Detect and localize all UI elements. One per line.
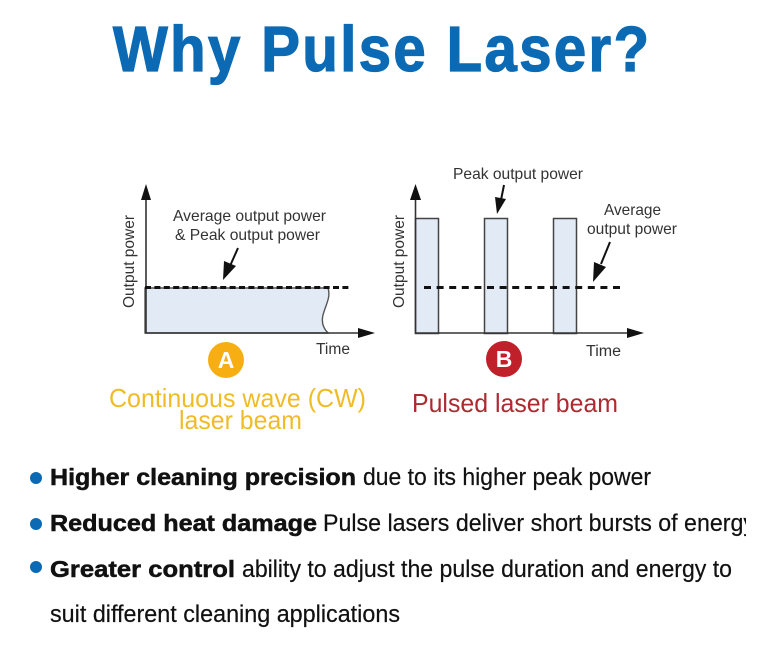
chart A time label: Time <box>316 341 350 358</box>
title: Why Pulse Laser? <box>113 13 649 85</box>
bullet: precision: due to its higher peak power <box>363 464 651 491</box>
chart A y axis label: Output power <box>121 215 138 308</box>
pulses <box>416 218 576 334</box>
bullet: control: suit different cleaning applications <box>50 601 400 628</box>
average power label: Average <box>604 202 661 219</box>
chart B time label: Time <box>586 343 621 360</box>
panel: pulsed chart <box>391 166 678 360</box>
badge B: B <box>496 346 512 372</box>
average power label <box>587 202 678 238</box>
caption A <box>109 383 366 435</box>
chart B dashed power line <box>424 286 620 289</box>
chart A power annotation: Average output power <box>173 208 327 225</box>
badge B <box>486 341 522 377</box>
bullet: heat damage <box>30 513 746 536</box>
panel: continuous wave chart <box>121 184 375 358</box>
peak arrow <box>495 185 506 214</box>
chart B y axis label: Output power <box>391 215 408 308</box>
chart A filled area <box>145 288 329 333</box>
chart A power annotation <box>173 208 327 244</box>
average power label: output power <box>587 221 678 238</box>
badge A: A <box>218 347 234 373</box>
average arrow <box>593 242 610 282</box>
bullet: precision <box>30 464 651 491</box>
caption A: laser beam <box>179 405 302 435</box>
bullet: heat damage: Reduced heat damage <box>50 510 317 536</box>
bullet: control <box>30 556 732 628</box>
bullet: heat damage: Pulse lasers deliver short bursts of energy <box>323 510 755 537</box>
chart A arrow <box>223 248 238 280</box>
caption B: Pulsed laser beam <box>412 388 618 418</box>
bullet: control: Greater control <box>50 556 235 582</box>
chart A axes <box>141 184 375 338</box>
bullet: control: ability to adjust the pulse duration and energy to <box>242 556 732 583</box>
bullet: precision: Higher cleaning precision <box>50 464 356 490</box>
chart A power annotation: & Peak output power <box>175 227 321 244</box>
chart B axes <box>410 184 644 338</box>
chart A dashed power line <box>145 286 350 289</box>
caption A: Continuous wave (CW) <box>109 383 366 413</box>
badge A <box>208 342 244 378</box>
peak power label: Peak output power <box>453 166 584 183</box>
bullet list <box>30 464 755 628</box>
